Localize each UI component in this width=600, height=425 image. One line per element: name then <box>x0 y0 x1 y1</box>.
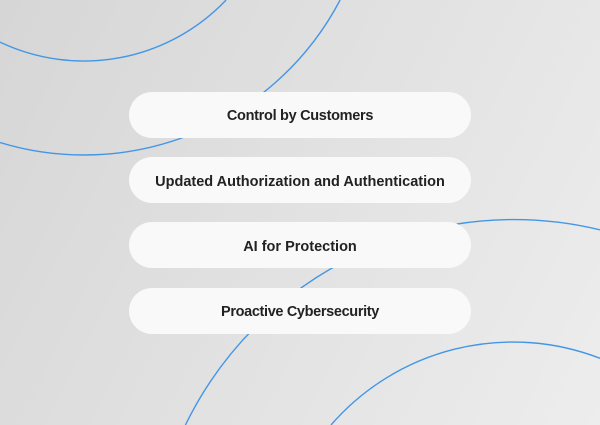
pill: AI for Protection: AI for Protection <box>243 239 357 255</box>
pill: AI for Protection <box>129 222 471 268</box>
pill: Proactive Cybersecurity: Proactive Cybersecurity <box>221 304 379 320</box>
pill: Control by Customers: Control by Customers <box>227 108 373 124</box>
pill: Control by Customers <box>129 92 471 138</box>
pill: Proactive Cybersecurity <box>129 288 471 334</box>
pill: Updated Authorization and Authentication: Updated Authorization and Authentication <box>155 174 445 190</box>
pill: Updated Authorization and Authentication <box>129 157 471 203</box>
